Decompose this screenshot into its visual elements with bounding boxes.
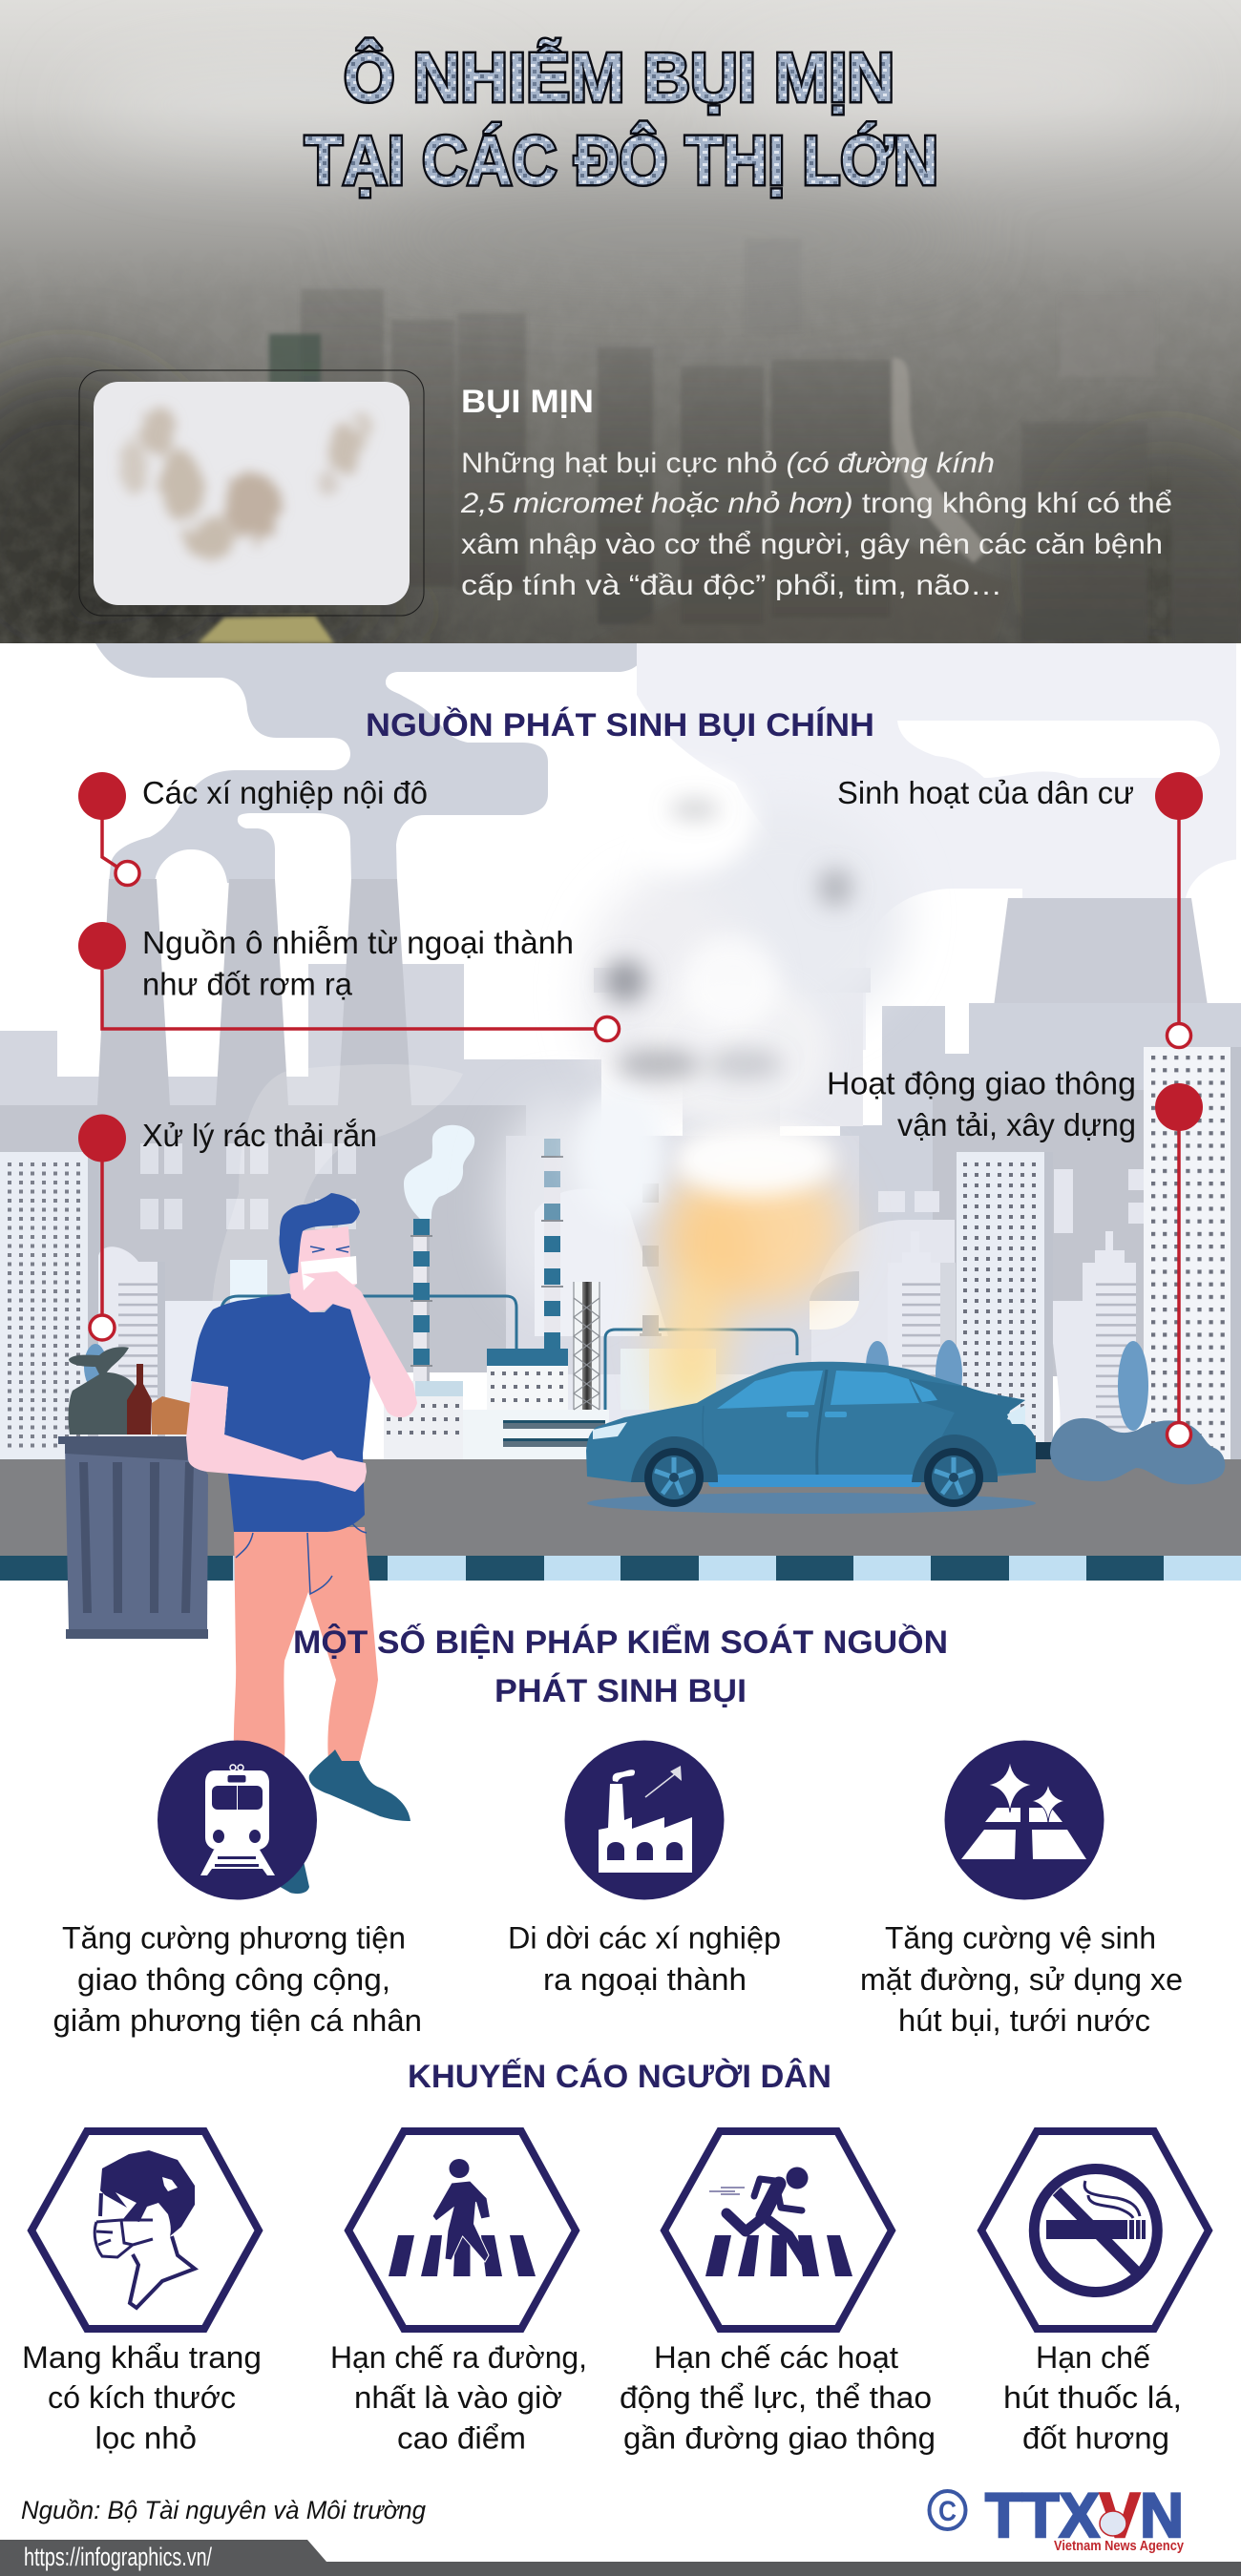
measure: relocate factories: Di dời các xí nghiệp [508, 1921, 781, 1956]
factory [384, 1381, 463, 1459]
advice: no smoking: Hạn chế [1036, 2340, 1150, 2375]
measure: relocate factories: ra ngoại thành [543, 1962, 747, 1997]
heading: control measures: MỘT SỐ BIỆN PHÁP KIỂM SOÁT NGUỒN [293, 1623, 948, 1661]
callout: inner-city factories: Các xí nghiệp nội đô [142, 775, 428, 810]
advice: limit physical activity [620, 2131, 936, 2456]
icon: no smoking [981, 2131, 1209, 2329]
chimney 3 in smoke [640, 1183, 662, 1336]
heading: control measures [293, 1623, 948, 1709]
smoke plume from chimney [404, 1125, 474, 1219]
source note: Nguồn: Bộ Tài nguyên và Môi trường [21, 2496, 426, 2524]
road [0, 1459, 1241, 1556]
measure: relocate factories [508, 1741, 781, 1997]
advice: limit physical activity: Hạn chế các hoạt [654, 2340, 898, 2375]
callout: suburban pollution: Nguồn ô nhiễm từ ngoại thành [142, 925, 574, 960]
measure: public transport: Tăng cường phương tiện [62, 1921, 406, 1956]
head and raised arm [289, 1226, 357, 1312]
man wearing mask [186, 1193, 417, 1894]
callout: solid waste treatment: Xử lý rác thải rắn [142, 1118, 377, 1153]
advice: limit going out [330, 2131, 587, 2456]
chimney 2 [541, 1139, 563, 1349]
shoes [309, 1749, 410, 1821]
advice: limit physical activity: gần đường giao thông [623, 2421, 936, 2456]
text block: definition of fine dust: cấp tính và “đầu độc” phổi, tim, não… [461, 570, 1002, 601]
text block: definition of fine dust: xâm nhập vào cơ thể người, gây nên các căn bệnh [461, 529, 1163, 560]
advice: wear a mask [22, 2131, 262, 2456]
car [586, 1362, 1225, 1514]
skyline right [840, 1003, 1241, 1355]
advice: limit going out: nhất là vào giờ [354, 2380, 562, 2415]
bottle [127, 1364, 152, 1435]
factory chimneys and skyline left [0, 964, 601, 1336]
advice: no smoking [981, 2131, 1209, 2456]
measure: public transport: giao thông công cộng, [77, 1962, 390, 1997]
icon: train [158, 1741, 317, 1899]
callout: suburban pollution [78, 922, 619, 1040]
advice: limit going out: cao điểm [397, 2421, 526, 2456]
icon: runner on crosswalk [664, 2131, 892, 2329]
callout: traffic and construction [827, 1065, 1203, 1447]
trees [84, 1340, 1148, 1431]
translucent smoke over left skyline [212, 1064, 463, 1336]
logo: TTXVN: TTXVN [985, 2480, 1184, 2550]
footer bar with URL [0, 2540, 1241, 2576]
cooling tower [984, 898, 1214, 1079]
icon: fine dust cloud [120, 403, 372, 560]
dark smoke cloud left [95, 643, 646, 883]
icon: clean road [945, 1741, 1104, 1899]
callout: inner-city factories [78, 772, 428, 886]
garbage bag [69, 1347, 136, 1435]
callout: solid waste treatment [78, 1115, 377, 1340]
measure: public transport [53, 1741, 422, 2038]
icon: pedestrian on crosswalk [348, 2131, 576, 2329]
measure: public transport: giảm phương tiện cá nhân [53, 2003, 422, 2038]
scene: polluted city background [0, 643, 1241, 1581]
measure: clean roads: hút bụi, tưới nước [898, 2003, 1150, 2038]
callout: household activity: Sinh hoạt của dân cư [837, 775, 1134, 810]
text block: definition of fine dust: Những hạt bụi cực nhỏ (có đường kính [461, 448, 995, 479]
advice: no smoking: hút thuốc lá, [1003, 2380, 1182, 2415]
exhaust cloud [1050, 1418, 1225, 1484]
logo: TTXVN: Vietnam News Agency [1054, 2538, 1185, 2554]
advice: wear a mask: có kích thước [48, 2380, 236, 2415]
icon: head with mask [32, 2131, 259, 2329]
title: Ô NHIỄM BỤI MỊN [344, 39, 894, 116]
measure: clean roads [860, 1741, 1183, 2038]
smoke and fire haze [575, 768, 907, 1412]
callout: traffic and construction: Hoạt động giao thông [827, 1065, 1136, 1101]
heading: main dust sources: NGUỒN PHÁT SINH BỤI CHÍNH [366, 707, 874, 743]
left arm and shirt [191, 1293, 370, 1532]
text block: definition of fine dust: 2,5 micromet hoặc nhỏ hơn) trong không khí có thể [460, 488, 1172, 519]
dotted towers [0, 1152, 88, 1459]
trash bin with garbage [58, 1347, 208, 1639]
chimney 1 [410, 1219, 432, 1381]
heading: advice for residents: KHUYẾN CÁO NGƯỜI DÂN [408, 2059, 831, 2095]
paper bag [152, 1396, 190, 1435]
icon: factory [565, 1741, 724, 1899]
light smoke cloud right [637, 643, 1236, 1050]
hero photo: smoggy city [0, 0, 1241, 697]
lattice tower [574, 1282, 599, 1410]
advice: wear a mask: lọc nhỏ [95, 2421, 197, 2456]
checker kerb [0, 1556, 1241, 1581]
footer bar with URL: https://infographics.vn/ [24, 2543, 212, 2571]
callout: traffic and construction: vận tải, xây dựng [897, 1107, 1136, 1142]
striped buildings [97, 1262, 158, 1459]
measure: clean roads: mặt đường, sử dụng xe [860, 1962, 1183, 1997]
callout: household activity [837, 772, 1203, 1048]
dust card [79, 370, 424, 616]
advice: no smoking: đốt hương [1022, 2421, 1169, 2456]
title: TẠI CÁC ĐÔ THỊ LỚN [305, 122, 938, 199]
trousers [234, 1527, 378, 1761]
logo: TTXVN: C [938, 2496, 957, 2527]
title [305, 39, 938, 199]
advice: wear a mask: Mang khẩu trang [22, 2340, 262, 2375]
advice: limit physical activity: động thể lực, thể thao [620, 2380, 932, 2415]
wheels [644, 1448, 983, 1507]
advice: limit going out: Hạn chế ra đường, [330, 2340, 587, 2375]
measure: clean roads: Tăng cường vệ sinh [885, 1921, 1156, 1956]
heading: control measures: PHÁT SINH BỤI [494, 1673, 747, 1709]
text block: definition of fine dust: BỤI MỊN [461, 384, 594, 420]
text block: definition of fine dust [460, 384, 1172, 601]
callout: suburban pollution: như đốt rơm rạ [142, 966, 353, 1002]
